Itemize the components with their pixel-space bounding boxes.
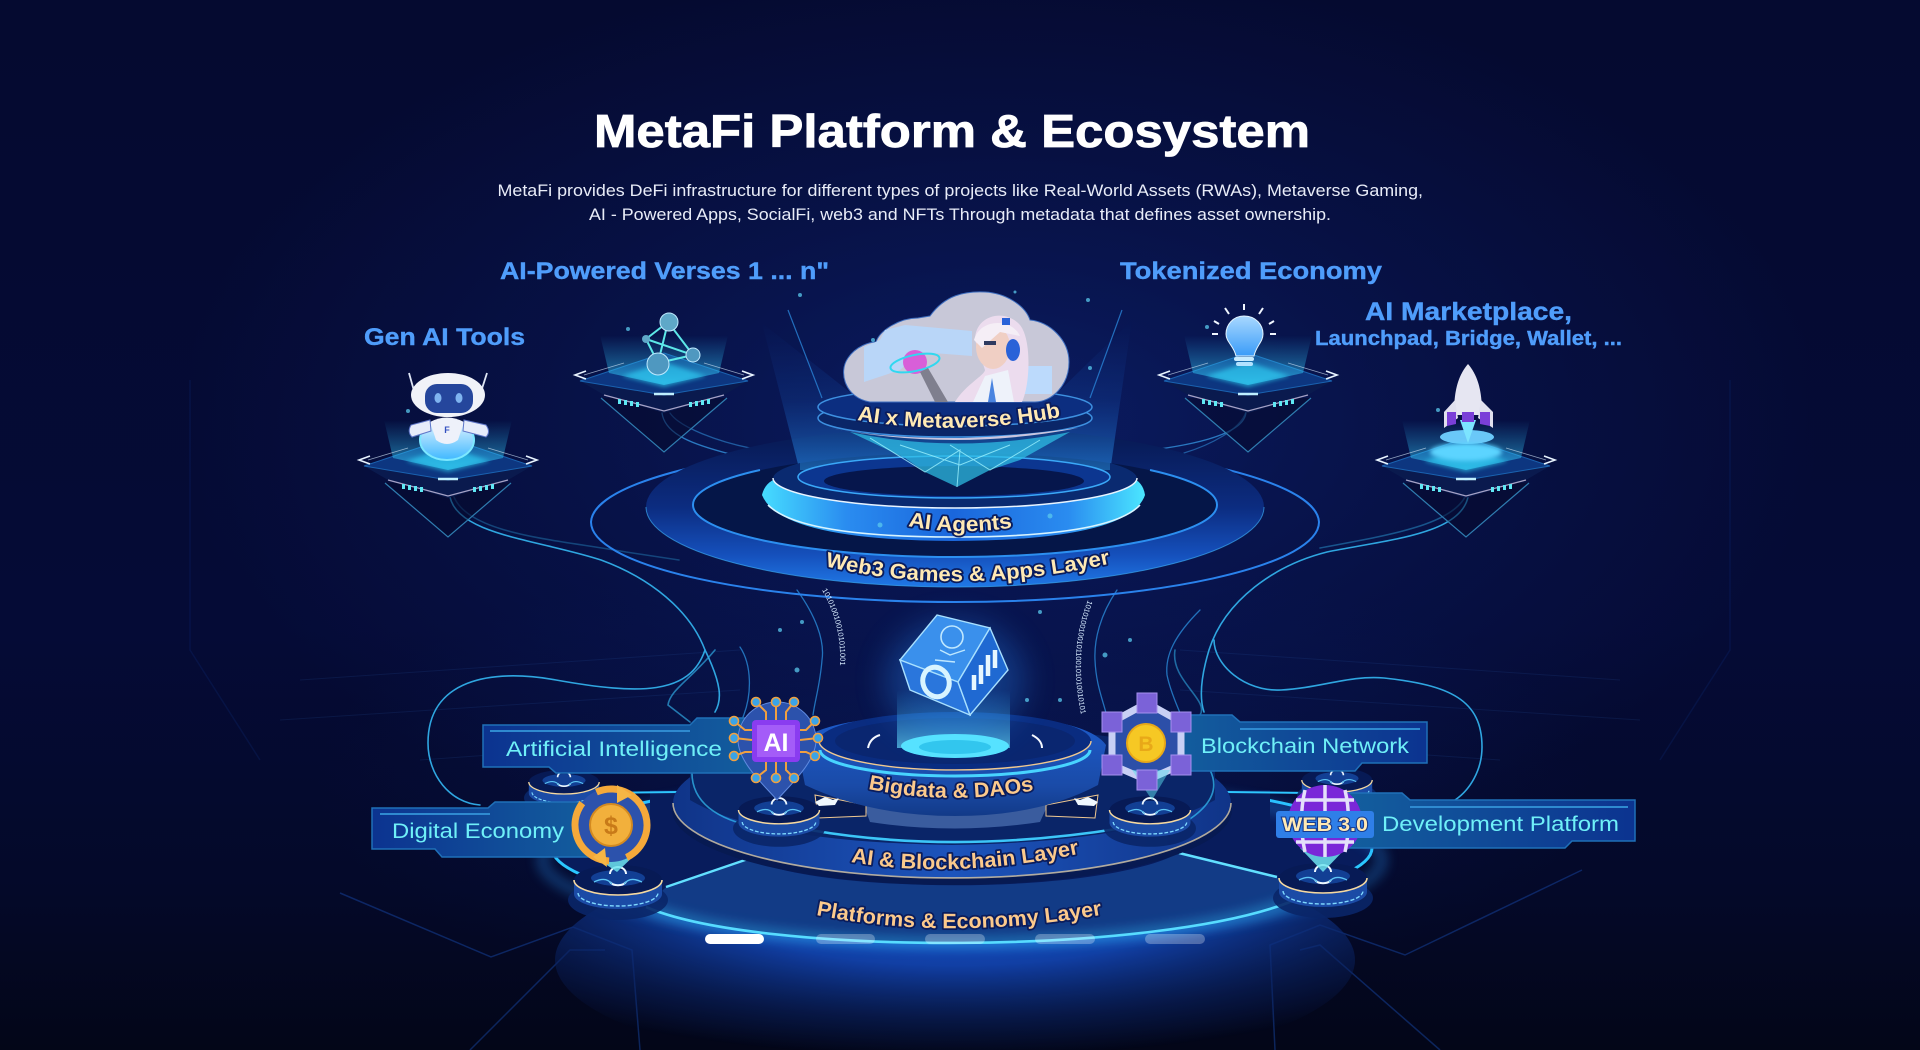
robot arm (920, 368, 948, 402)
glow ring back (552, 776, 1372, 920)
heading: AI Marketplace: Launchpad, Bridge, Wallet, ... (1315, 328, 1622, 350)
base: platforms layer body (542, 776, 1382, 1050)
connector curves (428, 412, 1482, 805)
icon: molecular network (642, 313, 700, 375)
icon: web 3.0 globe (1276, 785, 1374, 872)
platform: AI-Powered Verses (575, 335, 753, 452)
curve: Gen AI Tools to layers (428, 497, 719, 805)
description: MetaFi provides DeFi infrastructure for different types of projects like Real-World Assets (RWAs), Metaverse Gaming, (498, 182, 1423, 200)
curve: verses (662, 413, 750, 454)
label: Digital Economy (372, 802, 600, 857)
pedestals (524, 768, 1377, 920)
icon: data cube with hologram (885, 615, 1025, 758)
icon: digital economy coin (562, 776, 660, 874)
icon: AI chip (730, 698, 822, 800)
panel: Bigdata & DAOs layer (758, 672, 1146, 869)
description: AI - Powered Apps, SocialFi, web3 and NFTs Through metadata that defines asset ownership. (589, 206, 1331, 224)
platform: Gen AI Tools (359, 420, 537, 537)
hub ring (818, 388, 1092, 440)
icon: data mesh terrain (850, 432, 1070, 487)
icon: light bulb (1212, 304, 1276, 366)
label: Blockchain Network: Blockchain Network (1201, 735, 1410, 758)
platform: Tokenized Economy (1159, 335, 1337, 452)
girl (955, 316, 1028, 402)
icon: web 3.0 globe: WEB 3.0 (1282, 815, 1368, 836)
icon: robot (409, 373, 488, 460)
label: Development Platform (1345, 793, 1635, 848)
label: Artificial Intelligence: Artificial Intelligence (506, 738, 722, 761)
title: MetaFi Platform & Ecosystem (594, 105, 1310, 157)
text: Platforms & Economy Layer: Platforms & Economy Layer (816, 899, 1102, 931)
label: Artificial Intelligence (483, 718, 765, 773)
description (498, 182, 1423, 224)
panel: Web3 Games & Apps Layer ring (590, 387, 1320, 642)
heading: Gen AI Tools: Gen AI Tools (364, 324, 525, 351)
heading: AI Marketplace: AI Marketplace, (1365, 298, 1572, 326)
text: Bigdata & DAOs: Bigdata & DAOs (868, 773, 1034, 800)
curve: tokenized economy (1152, 412, 1246, 453)
icon: AI chip: AI (764, 729, 788, 757)
panel screens (864, 325, 972, 382)
text: AI Agents: AI Agents (906, 511, 1013, 538)
panel: AI & Blockchain Layer (672, 734, 1232, 885)
platform: AI Marketplace (1377, 420, 1555, 537)
label: Digital Economy: Digital Economy (392, 820, 565, 843)
hologram beam (762, 310, 1132, 481)
central arcs (740, 590, 1200, 717)
panel: AI Agents disc (762, 455, 1145, 541)
icon: robot: F (444, 425, 450, 435)
panel: Platforms & Economy Layer (646, 852, 1292, 954)
icon: digital economy coin: $ (604, 812, 618, 840)
text: AI x Metaverse Hub: AI x Metaverse Hub (856, 402, 1061, 430)
text: Web3 Games & Apps Layer: Web3 Games & Apps Layer (826, 550, 1110, 586)
label: Development Platform: Development Platform (1382, 813, 1619, 836)
curve: rocket to layers (1175, 497, 1482, 800)
icon: rocket (1430, 364, 1502, 461)
icon: blockchain hexagon (1102, 693, 1191, 800)
text: AI & Blockchain Layer: AI & Blockchain Layer (850, 841, 1080, 872)
binary streams: 101010010010110010101001010100100 (1076, 600, 1092, 714)
label: Blockchain Network (1170, 715, 1427, 771)
icon: cloud with metaverse character (844, 292, 1069, 402)
planet (889, 350, 941, 376)
icon: blockchain hexagon: B (1138, 733, 1154, 756)
heading: AI-Powered Verses: AI-Powered Verses 1 ... n" (500, 258, 829, 285)
binary streams (822, 588, 1092, 714)
pagination indicators (705, 934, 1205, 944)
binary streams: 1010100100101011001010100 (822, 588, 846, 666)
heading: Tokenized Economy: Tokenized Economy (1120, 258, 1383, 285)
heading: AI Marketplace (1315, 298, 1622, 350)
